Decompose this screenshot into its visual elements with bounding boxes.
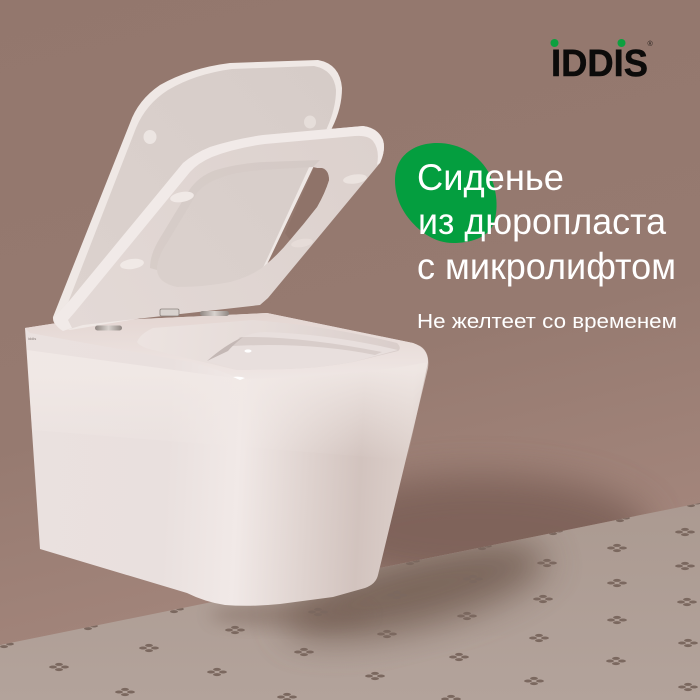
seat outer rim	[54, 126, 384, 331]
toilet seat	[54, 126, 384, 331]
heading: Сиденье	[417, 157, 564, 198]
heading: из дюропласта	[418, 201, 666, 242]
wall background	[0, 385, 700, 645]
floor with tile pattern	[0, 499, 700, 700]
bowl front body	[25, 313, 428, 606]
brand mark on bowl: iddis	[28, 336, 36, 341]
heading: с микролифтом	[417, 246, 676, 287]
bowl opening	[137, 320, 400, 370]
bowl top rim	[25, 313, 428, 379]
toilet lid	[53, 60, 342, 330]
heading	[417, 157, 676, 287]
logo: IDDIS	[551, 43, 648, 85]
hole rim shade	[150, 160, 320, 270]
wall seen through seat hole	[285, 168, 329, 240]
logo: ®	[648, 40, 654, 48]
hinges	[95, 309, 229, 330]
rim highlight	[233, 377, 245, 380]
subheading: Не желтеет со временем	[417, 311, 677, 333]
inner bowl well	[207, 332, 398, 370]
toilet bowl	[25, 313, 428, 606]
lid bumpers	[144, 130, 156, 144]
green blob	[395, 143, 497, 243]
seat bumpers	[169, 190, 195, 204]
